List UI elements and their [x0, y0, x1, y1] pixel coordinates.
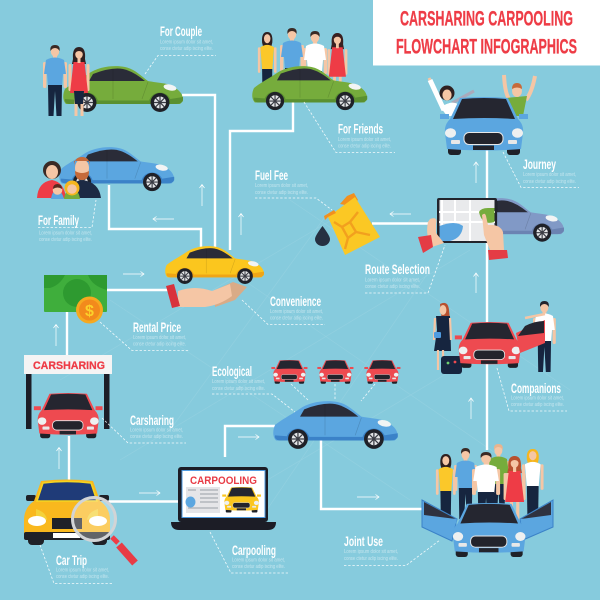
- label: rental price: Lorem ipsum dolor sit amet,: [133, 335, 186, 341]
- label: convenience: Lorem ipsum dolor sit amet,: [270, 309, 323, 315]
- ecological red cars and blue car: [271, 360, 400, 449]
- flow arrows: [54, 162, 478, 500]
- label: convenience: Convenience: [270, 293, 321, 309]
- label: journey: Journey: [523, 156, 556, 172]
- label: carpooling: [210, 532, 288, 573]
- label: car trip: [40, 545, 112, 584]
- label: ecological: Lorem ipsum dolor sit amet,: [212, 379, 265, 385]
- label: for friends: For Friends: [338, 120, 383, 136]
- money and coin illustration: $: [85, 303, 94, 320]
- label: route selection: Lorem ipsum dolor sit amet,: [365, 278, 420, 284]
- label: journey: conse ctetur adip iscing elite.: [523, 179, 576, 185]
- label: joint use: [344, 533, 440, 566]
- carsharing gate and red car: [24, 355, 112, 438]
- money and coin illustration: [44, 275, 107, 324]
- label: for family: conse ctetur adip iscing elite.: [39, 237, 92, 243]
- label: for couple: For Couple: [160, 23, 202, 39]
- label: for friends: Lorem ipsum dolor sit amet,: [338, 137, 391, 143]
- label: car trip: conse ctetur adip iscing elite.: [56, 574, 109, 580]
- for friends illustration: [252, 28, 367, 110]
- label: convenience: conse ctetur adip iscing elite.: [270, 316, 323, 322]
- journey car with raised-arm people: [429, 75, 535, 155]
- label: ecological: conse ctetur adip iscing elite.: [212, 386, 265, 392]
- label: carsharing: conse ctetur adip iscing elite.: [130, 434, 183, 440]
- label: car trip: Car Trip: [56, 552, 87, 568]
- label: ecological: Ecological: [212, 363, 252, 379]
- label: for friends: conse ctetur adip iscing elite.: [338, 144, 391, 150]
- companions car and people: [434, 301, 556, 374]
- label: for family: For Family: [38, 212, 79, 228]
- label: carpooling: Carpooling: [232, 542, 276, 558]
- label: ecological: [212, 363, 295, 412]
- label: companions: Companions: [511, 380, 561, 396]
- title box: [373, 0, 600, 66]
- label: car trip: Lorem ipsum dolor sit amet,: [56, 568, 109, 574]
- label: route selection: Route Selection: [365, 261, 430, 277]
- label: joint use: Joint Use: [344, 533, 383, 549]
- label: for couple: conse ctetur adip iscing elite.: [160, 46, 213, 52]
- label: journey: Lorem ipsum dolor sit amet,: [523, 172, 576, 178]
- yellow car on hand illustration: [165, 246, 264, 308]
- carsharing gate and red car: CARSHARING: [33, 360, 105, 372]
- label: fuel fee: [255, 167, 332, 210]
- label: fuel fee: Lorem ipsum dolor sit amet,: [255, 183, 308, 189]
- label: carpooling: conse ctetur adip iscing elite.: [232, 564, 285, 570]
- label: rental price: Rental Price: [133, 319, 181, 335]
- route selection tablet illustration: [418, 198, 564, 260]
- connector lines: [67, 95, 487, 509]
- label: companions: conse ctetur adip iscing elite.: [511, 402, 564, 408]
- label: rental price: [100, 319, 190, 350]
- label: fuel fee: Fuel Fee: [255, 167, 288, 183]
- label: joint use: conse ctetur adip iscing elite.: [344, 556, 398, 562]
- label: rental price: conse ctetur adip iscing elite.: [133, 342, 186, 348]
- laptop carpooling illustration: CARPOOLING: [190, 475, 257, 487]
- label: for friends: [304, 102, 395, 152]
- label: for family: [38, 200, 96, 243]
- label: journey: [503, 152, 579, 188]
- label: carsharing: Lorem ipsum dolor sit amet,: [130, 428, 183, 434]
- label: carsharing: [102, 412, 186, 443]
- label: for family: Lorem ipsum dolor sit amet,: [39, 230, 92, 236]
- label: joint use: Lorem ipsum dolor sit amet,: [344, 549, 398, 555]
- label: for couple: [145, 23, 216, 74]
- label: route selection: conse ctetur adip iscing elite.: [365, 284, 420, 290]
- label: carpooling: Lorem ipsum dolor sit amet,: [232, 558, 285, 564]
- label: fuel fee: conse ctetur adip iscing elite.: [255, 190, 308, 196]
- label: companions: [497, 368, 567, 411]
- label: route selection: [365, 245, 445, 293]
- label: companions: Lorem ipsum dolor sit amet,: [511, 396, 564, 402]
- joint use car and people: [422, 444, 553, 557]
- label: convenience: [242, 293, 325, 324]
- label: carsharing: Carsharing: [130, 412, 174, 428]
- label: for couple: Lorem ipsum dolor sit amet,: [160, 40, 213, 46]
- for family illustration: [37, 147, 174, 199]
- laptop carpooling illustration: [171, 467, 276, 530]
- for couple illustration: [43, 45, 183, 116]
- car trip with magnifier illustration: [24, 480, 135, 563]
- fuel can and oil drop: [315, 193, 380, 255]
